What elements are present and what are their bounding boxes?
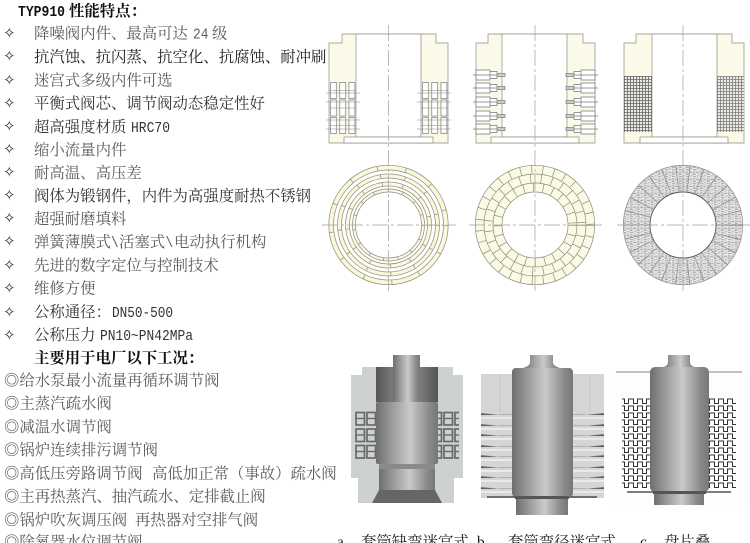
feature 11: ✧ [3,256,16,274]
feature 9: 超强耐磨填料 [34,209,127,228]
feature 9 [3,209,127,228]
feature 1: ✧ [3,24,16,42]
ring drawing b [469,150,602,293]
3D render c [615,355,750,510]
feature 1 [3,24,227,44]
feature 10 [3,232,266,252]
feature 13: DN50-500 [112,305,173,322]
application 1: ◎给水泵最小流量再循环调节阀 [4,372,219,390]
feature 10: \ [166,235,173,252]
feature 9: ✧ [3,209,16,227]
feature 7: 耐高温、高压差 [34,163,142,182]
feature 5: 超高强度材质 [34,117,126,136]
feature list [3,24,326,345]
feature 6: 缩小流量内件 [34,141,126,159]
feature 6: ✧ [3,140,16,158]
application 7: 再热器对空排气阀 [135,511,258,529]
feature 11: 先进的数字定位与控制技术 [34,256,219,274]
title: TYP910 [18,4,65,21]
application 5: 高低加正常（事故）疏水阀 [152,464,337,482]
feature 14: ✧ [3,326,16,344]
feature 7: ✧ [3,163,16,181]
feature 12: 维修方便 [34,280,96,298]
3D render a [351,355,463,503]
feature 4: ✧ [3,94,16,112]
feature 10: ✧ [3,232,16,250]
feature 14: PN10~PN42MPa [100,328,193,345]
feature 1: 24 [193,26,208,44]
3D render b [481,355,604,515]
feature 13: ✧ [3,303,16,321]
feature 10: \ [111,235,119,252]
feature 1: 降噪阀内件、最高可达 [34,24,189,42]
ring drawing c [617,150,750,293]
feature 8: 阀体为锻钢件，内件为高强度耐热不锈钢 [34,186,311,205]
title: 性能特点： [69,1,146,20]
feature 5: HRC70 [131,120,170,137]
feature 10: 电动执行机构 [174,233,266,251]
feature 3: ✧ [3,71,16,89]
feature 5: ✧ [3,117,16,135]
heading: applications: 主要用于电厂以下工况： [34,349,203,367]
section drawing c [624,25,744,150]
feature 2: ✧ [3,47,16,65]
feature 12: ✧ [3,279,16,297]
feature 2: 抗汽蚀、抗闪蒸、抗空化、抗腐蚀、耐冲刷 [34,47,326,66]
feature 13: 公称通径： [34,303,111,321]
feature 4: 平衡式阀芯、调节阀动态稳定性好 [34,94,265,112]
feature 14 [3,326,193,345]
application 6: ◎主再热蒸汽、抽汽疏水、定排截止阀 [4,488,266,506]
feature 10: 弹簧薄膜式 [34,233,111,251]
feature 7 [3,163,142,182]
application 3: ◎减温水调节阀 [4,418,112,436]
feature 1: 级 [212,24,227,42]
section drawing a [326,25,451,150]
feature 13 [3,303,173,322]
feature 5 [3,117,170,137]
application 5: ◎高低压旁路调节阀 [4,466,143,482]
ring drawing a [322,150,456,293]
feature 3: 迷宫式多级内件可选 [34,72,173,90]
application 7: ◎锅炉吹灰调压阀 [4,512,127,529]
title [18,1,146,21]
feature 12 [3,279,96,298]
application 2: ◎主蒸汽疏水阀 [4,394,112,412]
applications list [4,372,337,543]
feature 10: 活塞式 [119,233,165,251]
feature 8: ✧ [3,186,16,204]
application 4: ◎锅炉连续排污调节阀 [4,441,158,459]
feature 6 [3,140,126,159]
feature 14: 公称压力 [34,326,96,344]
section drawing b [473,25,598,150]
